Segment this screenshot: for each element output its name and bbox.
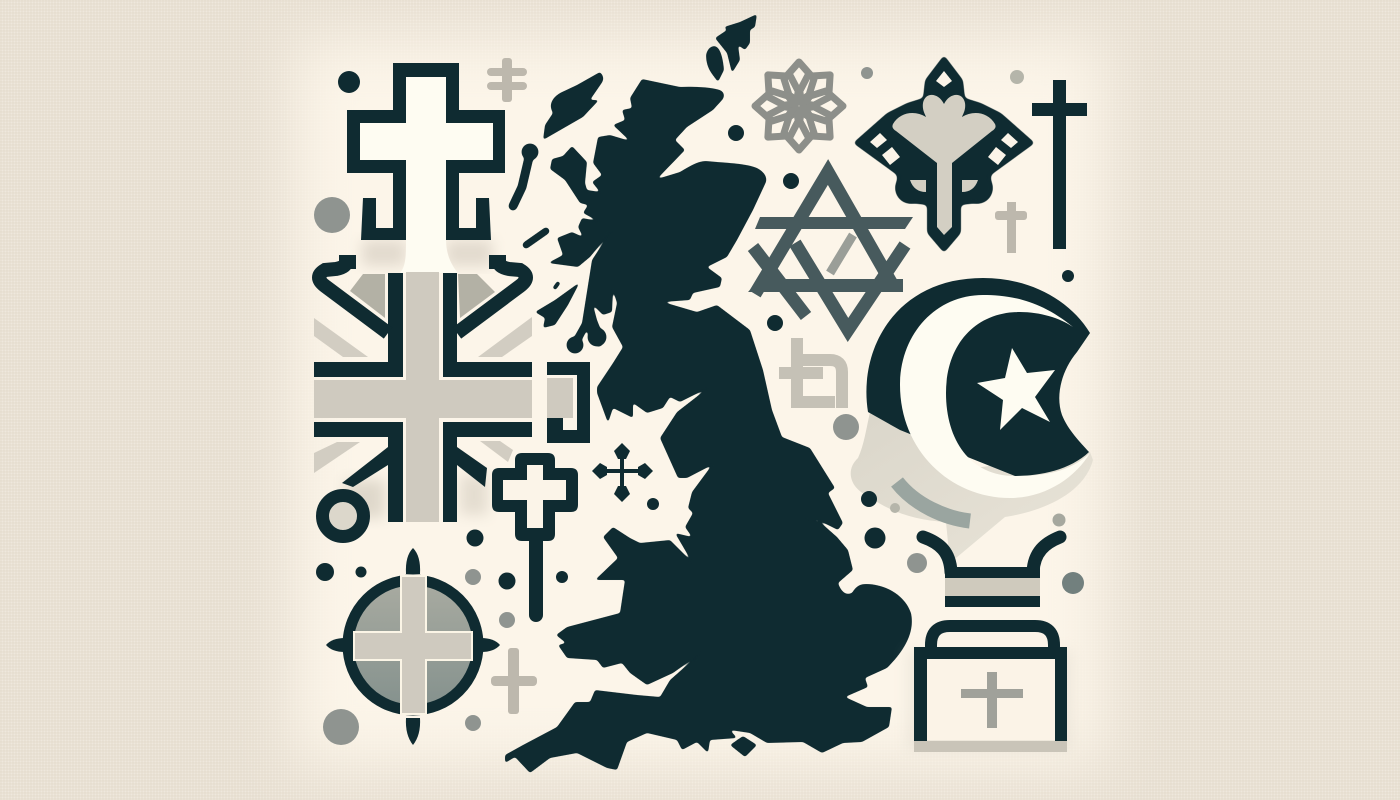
icon: double-bar cross, grey	[487, 58, 527, 102]
icon: star of David	[748, 172, 913, 330]
flag lower shadows	[345, 475, 488, 518]
flag central cross	[314, 272, 532, 522]
decorative dots, dark	[316, 71, 1074, 590]
icon: decorated small cross	[592, 443, 653, 502]
icon: crown-like symbol	[923, 537, 1060, 607]
ornament openings	[870, 71, 1018, 165]
icon: circled cross	[326, 548, 500, 745]
icon: ornamental cross	[853, 55, 1035, 253]
ornament petals	[892, 95, 996, 235]
flag right bracket	[547, 362, 590, 443]
icon: flower symbol	[755, 62, 843, 150]
mainland	[505, 79, 912, 773]
crescent light band	[900, 295, 1090, 498]
icon: thin cross	[1032, 80, 1087, 249]
map of Great Britain	[505, 14, 912, 773]
icon: union flag	[314, 262, 590, 522]
flag curled diagonals	[319, 262, 526, 333]
flag light diagonals	[314, 317, 532, 473]
icon: box with cross	[907, 626, 1072, 752]
Jura	[554, 282, 559, 289]
cross on disc	[354, 576, 472, 714]
Islay	[535, 282, 580, 328]
ornament outline	[853, 55, 1035, 253]
Outer Hebrides	[543, 72, 603, 140]
Uist	[513, 153, 530, 206]
icon: lower grey cross	[491, 648, 537, 714]
icon: small grey cross	[995, 202, 1027, 253]
disc	[348, 580, 478, 710]
icon: grey letter-like symbol	[779, 338, 842, 408]
crescent shadow	[851, 412, 1093, 563]
flag grey wedges	[350, 274, 495, 318]
compass spikes	[326, 548, 500, 745]
icon: medium outlined cross	[492, 453, 578, 622]
Shetland	[706, 46, 724, 82]
icon: crescent and star	[851, 278, 1093, 563]
crescent grey arc	[897, 482, 970, 521]
Barra	[526, 231, 546, 245]
star	[977, 348, 1055, 430]
crescent dark body	[866, 278, 1090, 476]
Isle of Wight	[730, 736, 757, 757]
decorative dots, grey	[314, 67, 1084, 745]
icon: large cross	[347, 63, 505, 273]
flag dark bars	[314, 273, 532, 522]
icon: ring	[322, 496, 364, 536]
Kintyre lobes	[566, 336, 584, 354]
